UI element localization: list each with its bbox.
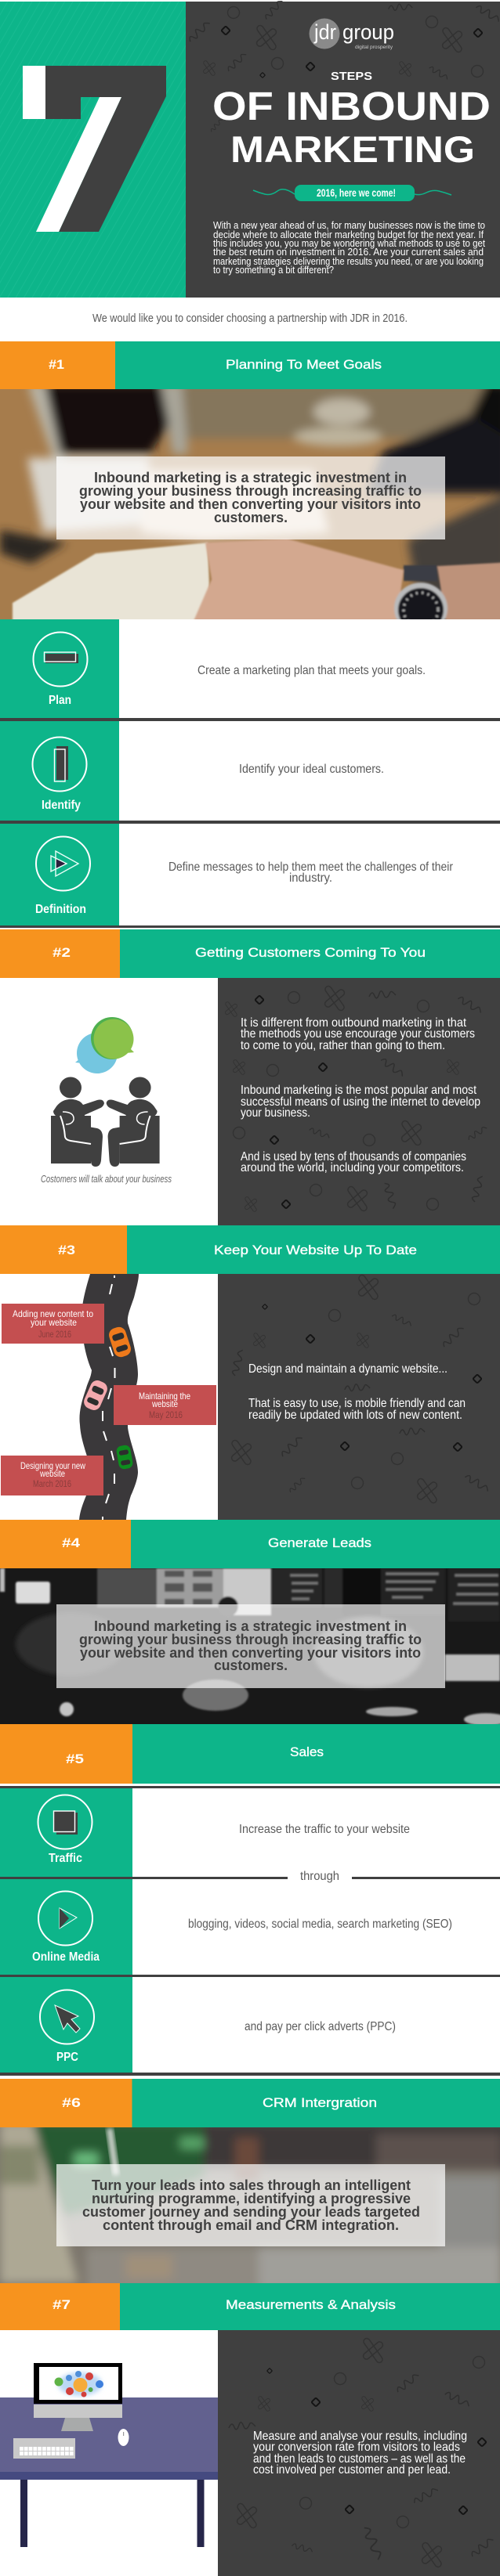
step 5 rows (0, 1786, 500, 2076)
step 4 header: Generate Leads (268, 1535, 371, 1550)
row: traffic: Increase the traffic to your website (239, 1823, 410, 1836)
desk (0, 2397, 218, 2547)
person left (51, 1077, 104, 1167)
step 1 header (0, 341, 500, 389)
step 7 text: and then leads to customers – as well as the (253, 2452, 466, 2466)
overlay quote box: Turn your leads into sales through an intelligent (92, 2177, 411, 2193)
screen icons (55, 2371, 103, 2397)
milestone: designing your new website: Designing your new (20, 1460, 85, 1471)
car: orange (107, 1326, 132, 1358)
title: MARKETING (230, 128, 475, 170)
overlay quote box: customers. (214, 1658, 288, 1673)
row: ppc (40, 1990, 396, 2064)
row: ppc: PPC (56, 2051, 78, 2064)
row: traffic: Traffic (49, 1852, 82, 1865)
title: STEPS (331, 70, 372, 83)
step 1 header: #1 (49, 357, 64, 372)
row: identify (33, 738, 384, 812)
step 5 header: Sales (290, 1744, 324, 1759)
step 3 dark text panel (218, 1274, 500, 1520)
overlay quote box: your website and then converting your visitors into (80, 1645, 421, 1661)
overlay quote box: growing your business through increasing traffic to (79, 483, 422, 499)
caption: Costomers will talk about your business (41, 1174, 172, 1185)
step 1 header: Planning To Meet Goals (226, 357, 382, 372)
monitor (34, 2363, 122, 2431)
milestone: designing your new website: website (39, 1468, 65, 1479)
hero doodle pattern (187, 0, 500, 132)
overlay quote box: Inbound marketing is a strategic investment in (94, 1618, 407, 1634)
step 6 header (0, 2079, 500, 2127)
row: ppc: and pay per click adverts (PPC) (245, 2020, 396, 2033)
title (212, 70, 491, 170)
intro paragraph: to try something a bit different? (213, 264, 334, 276)
jdr group logo: group (342, 20, 394, 44)
milestone: maintaining the website: website (151, 1398, 178, 1409)
overlay quote box: customer journey and sending your leads targeted (82, 2204, 420, 2220)
overlay quote box: customers. (214, 510, 288, 525)
milestone: adding new content: June 2016 (38, 1329, 71, 1340)
row: definition (35, 836, 454, 916)
step 2 header (0, 929, 500, 978)
overlay quote box: growing your business through increasing traffic to (79, 1632, 422, 1647)
step 7 text: cost involved per customer and per lead. (253, 2463, 451, 2477)
intro paragraph: the best return on investment in 2016. Are your current sales and (213, 246, 484, 258)
milestone: designing your new website (1, 1456, 103, 1495)
jdr group logo (309, 19, 394, 50)
big number 7 (23, 66, 166, 232)
step 4 header: #4 (62, 1535, 81, 1550)
row: online media (32, 1892, 452, 1964)
car: green (116, 1445, 133, 1470)
milestone: designing your new website: March 2016 (33, 1478, 71, 1489)
overlay quote box: your website and then converting your visitors into (80, 496, 421, 512)
step 7 text: your conversion rate from visitors to leads (253, 2441, 460, 2454)
step 3 text: readily be updated with lots of new content. (248, 1409, 462, 1422)
step 3 text: Design and maintain a dynamic website... (248, 1362, 447, 1376)
overlay quote box: nurturing programme, identifying a progressive (92, 2191, 411, 2206)
step 3 header: Keep Your Website Up To Date (214, 1243, 417, 1257)
step 7 illustration: desk and computer (0, 2363, 218, 2547)
step 7 doodles (229, 2337, 495, 2568)
row: identify: Identify your ideal customers. (239, 763, 384, 776)
step 2 text: It is different from outbound marketing in that (241, 1016, 466, 1030)
step 2 header: Getting Customers Coming To You (195, 945, 426, 960)
ribbon: 2016, here we come (253, 185, 451, 201)
step 2 header: #2 (53, 945, 71, 960)
keyboard (13, 2438, 75, 2459)
row: definition: industry. (289, 871, 332, 885)
milestone: maintaining the website: May 2016 (149, 1409, 183, 1420)
speech bubbles (75, 1017, 134, 1073)
step 3 text (248, 1362, 466, 1422)
step 3 text: That is easy to use, is mobile friendly and can (248, 1397, 466, 1410)
step 3 header: #3 (58, 1243, 75, 1257)
step 3 doodles (230, 1274, 490, 1504)
jdr group logo: jdr (313, 20, 336, 44)
row: plan: Plan (49, 694, 71, 707)
step 6 header: CRM Intergration (263, 2095, 377, 2110)
step 4 photo: cafe interior (0, 1568, 500, 1726)
step 2 text: to come to you, rather than going to them. (241, 1039, 445, 1052)
step 2 text: your business. (241, 1106, 310, 1120)
row: definition: Define messages to help them meet the challenges of their (168, 860, 454, 874)
step 6 photo: blurred seedling (0, 2122, 500, 2290)
title: OF INBOUND (212, 84, 491, 128)
jdr group logo: digital prosperity (355, 45, 393, 50)
person right (107, 1077, 160, 1167)
hero green panel (0, 2, 186, 298)
row: plan (33, 633, 426, 707)
step 1 rows (0, 619, 500, 928)
milestone: adding new content: Adding new content to (13, 1308, 93, 1319)
step 3 header (0, 1225, 500, 1274)
connector word: through: through (300, 1870, 339, 1883)
intro paragraph (213, 219, 485, 276)
row: definition: Definition (35, 903, 86, 916)
step 7 dark text panel (218, 2330, 500, 2576)
step 2 text: around the world, including your competitors. (241, 1161, 464, 1174)
mouse (118, 2429, 129, 2446)
step 2 text: And is used by tens of thousands of companies (241, 1150, 466, 1164)
milestone: adding new content (2, 1304, 104, 1344)
car: pink (82, 1378, 110, 1412)
step 7 header: #7 (53, 2297, 71, 2312)
step 3 road timeline (1, 1274, 216, 1520)
step 2 illustration: two people talking (41, 1017, 172, 1185)
milestone: adding new content: your website (31, 1317, 77, 1328)
step 6 header: #6 (62, 2095, 81, 2110)
hero banner (0, 0, 500, 298)
milestone: maintaining the website (114, 1385, 216, 1425)
overlay quote box: Inbound marketing is a strategic investment in (94, 470, 407, 485)
road (79, 1274, 139, 1520)
overlay quote box (56, 2164, 445, 2246)
step 2 text (241, 1016, 480, 1174)
overlay quote box (56, 456, 445, 539)
row: traffic (38, 1795, 410, 1865)
milestone: maintaining the website: Maintaining the (139, 1391, 190, 1402)
ribbon: 2016, here we come: 2016, here we come! (317, 186, 396, 199)
step 1 photo: hand writing in notebook (0, 384, 500, 634)
row: identify: Identify (42, 799, 81, 812)
step 2 dark text panel (218, 978, 500, 1225)
hero dark panel (186, 2, 500, 298)
step 7 text: Measure and analyse your results, including (253, 2430, 467, 2443)
step 5 header (0, 1724, 500, 1784)
step 7 header (0, 2283, 500, 2330)
step 5 header: #5 (66, 1752, 84, 1766)
partnership line: We would like you to consider choosing a partnership with JDR in 2016. (92, 312, 408, 325)
row: online media: blogging, videos, social media, search marketing (SEO) (188, 1918, 452, 1931)
step 7 text (253, 2430, 467, 2477)
overlay quote box: content through email and CRM integration. (103, 2217, 399, 2233)
step 7 header: Measurements & Analysis (226, 2297, 396, 2312)
step 4 header (0, 1520, 500, 1568)
row: online media: Online Media (32, 1950, 100, 1964)
step 2 doodles (225, 985, 488, 1212)
overlay quote box (56, 1604, 445, 1688)
row: plan: Create a marketing plan that meets your goals. (197, 664, 426, 677)
